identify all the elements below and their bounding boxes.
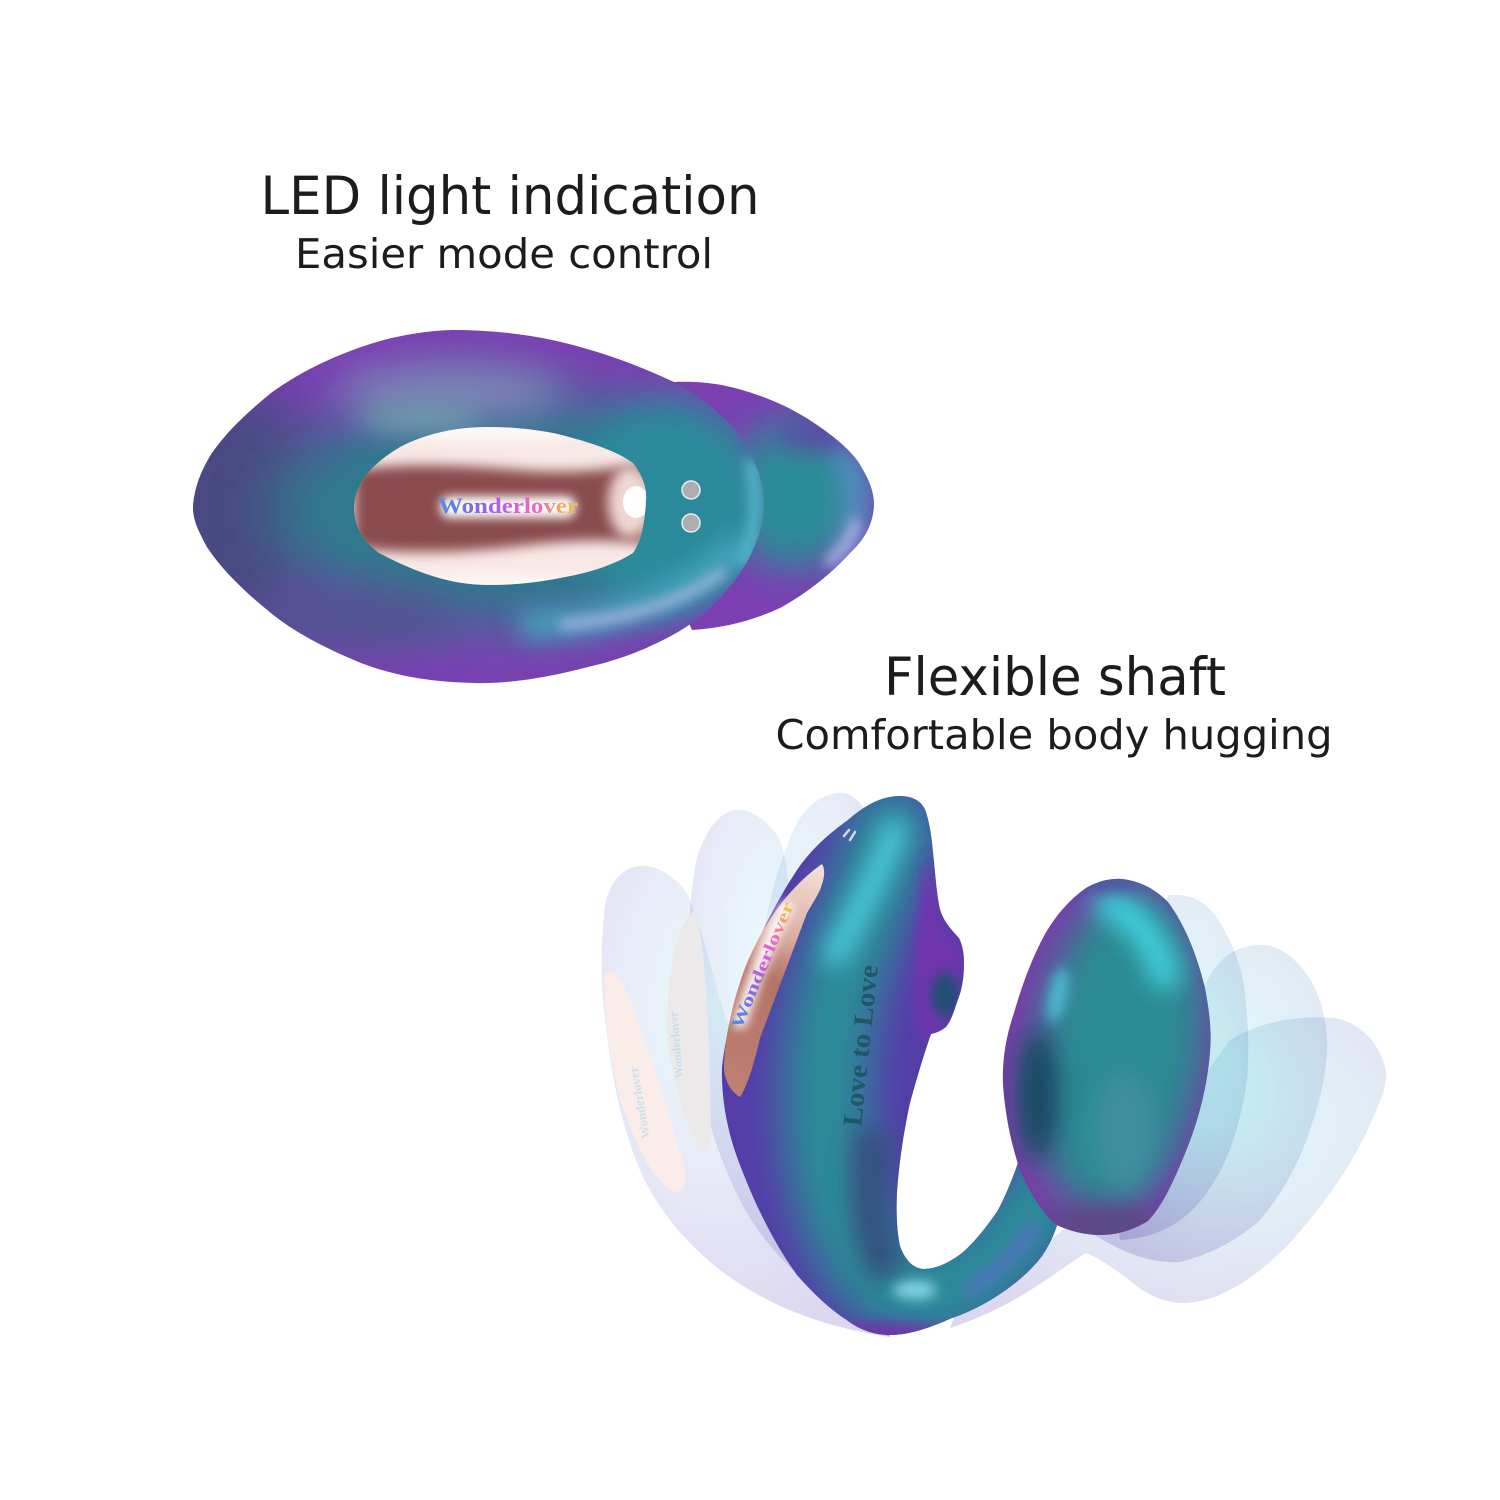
dark left shadow [1018,1030,1058,1160]
logo text: Wonderlover [438,493,578,518]
ghost window 3 [730,885,800,1090]
heading: Flexible shaft: Flexible shaft [884,647,1226,708]
copper window [724,864,824,1097]
purple right shoulder [914,850,963,1040]
ghost window 1 [604,972,686,1192]
cyan highlight [835,830,895,955]
logo vertical: Wonderlover [727,898,798,1032]
LED window [354,426,652,587]
top edge blue [1060,875,1140,891]
button dots [844,830,855,840]
subheading: Comfortable body hugging: Comfortable body hugging [776,711,1332,759]
product: flexible shaft body [722,796,1060,1347]
purple bottom [846,1316,940,1335]
lower navy blend [870,1130,890,1275]
heading: Flexible shaft [776,647,1332,759]
neck highlight [893,1281,937,1299]
heading: LED light indication: LED light indication [260,166,760,227]
subheading: Easier mode control: Easier mode control [295,230,713,278]
product: egg end [1002,878,1211,1235]
teal core [1013,875,1227,1225]
logo halo [740,908,786,1022]
teal ridge [826,830,1045,1294]
product: top view with LED [145,330,875,683]
motion ghosts: left [602,793,900,1337]
logo halo [440,496,576,518]
embossed text: Love to Love [837,963,884,1128]
rear lobe [660,382,875,630]
ghost logo 2: Wonderlover [666,1010,686,1079]
buttons [682,481,700,532]
heading: LED light indication [260,166,760,278]
ghost window 2 [667,911,711,1149]
motion ghosts: right [950,895,1386,1328]
ghost logo 1: Wonderlover [625,1065,653,1140]
main body [145,330,770,683]
lower purple [1044,1194,1159,1235]
cyan top [1110,905,1165,975]
nub shadow [931,973,959,1017]
